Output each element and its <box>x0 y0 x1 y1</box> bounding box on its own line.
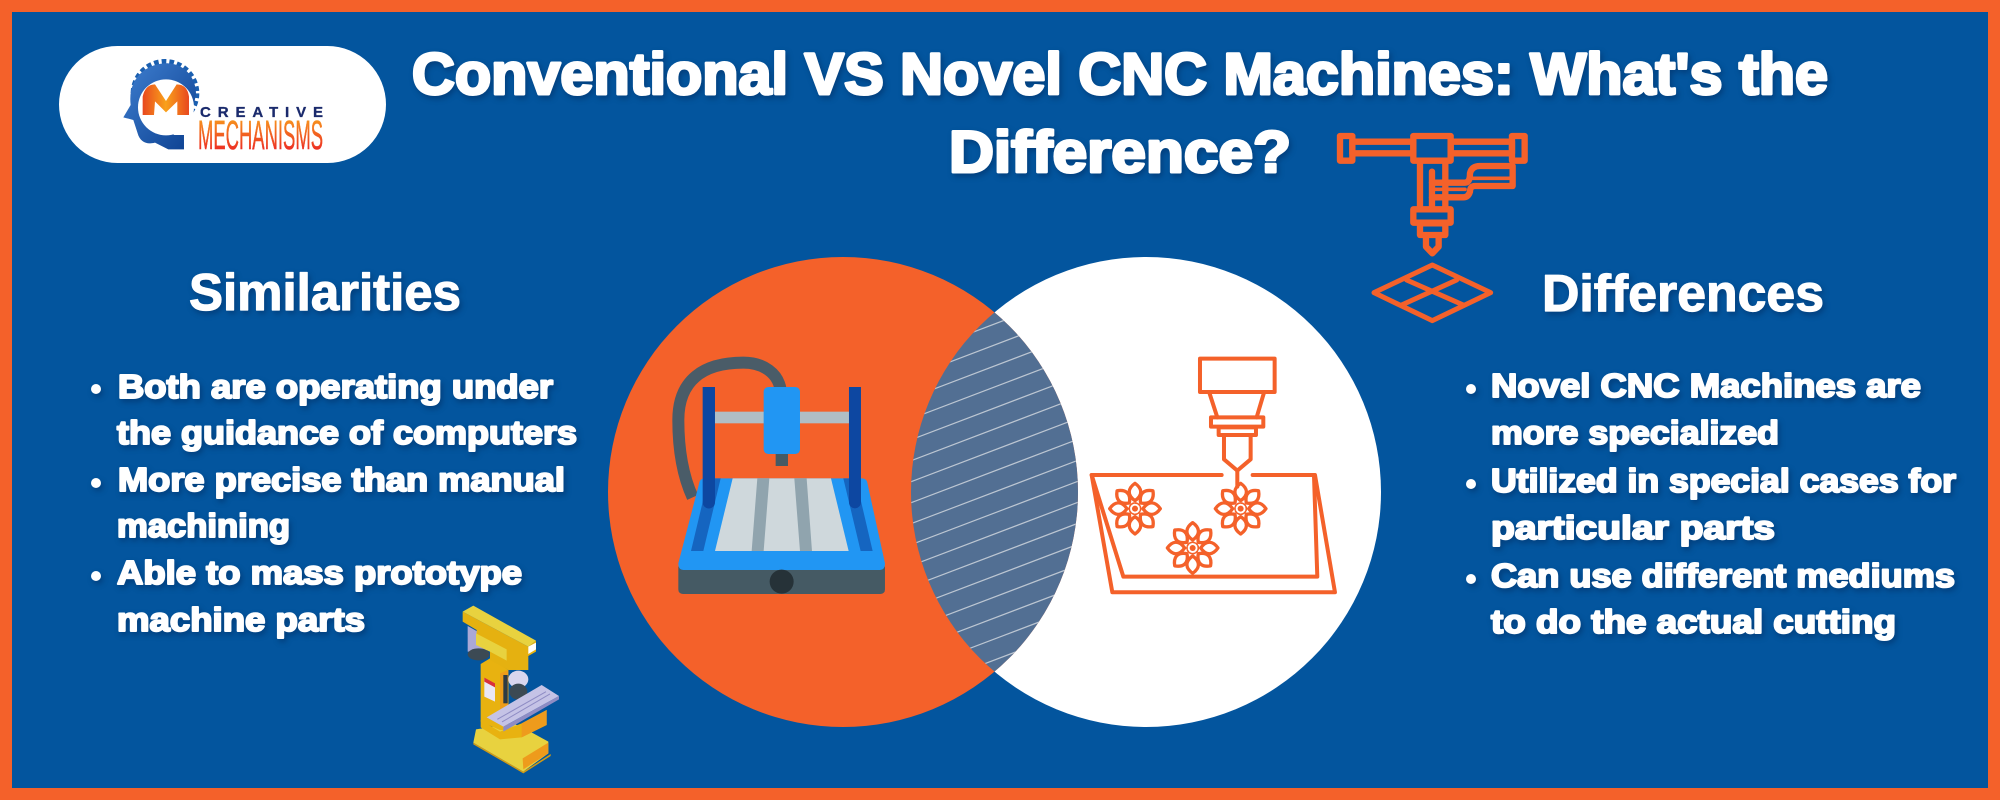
heading: similarities: Similarities <box>189 264 461 322</box>
logo wordmark: creative: CREATIVE <box>200 104 323 121</box>
icon: yellow milling machine <box>463 606 559 773</box>
heading: differences: Differences <box>1542 265 1824 323</box>
icon: laser cutter with flowers <box>1092 359 1335 592</box>
title: Difference? <box>949 120 1291 185</box>
venn diagram <box>608 257 1381 727</box>
logo mark: gear head <box>123 62 200 149</box>
similarities list: More precise than manual <box>118 461 565 498</box>
venn overlap hatched lens <box>911 312 1078 672</box>
venn right circle <box>911 257 1381 727</box>
differences list: Utilized in special cases for <box>1491 462 1956 499</box>
logo: Creative Mechanisms <box>59 46 386 163</box>
similarities list <box>91 368 577 638</box>
similarities list: machining <box>117 507 290 544</box>
differences list: to do the actual cutting <box>1491 603 1896 640</box>
differences list: more specialized <box>1491 414 1779 451</box>
differences list <box>1466 367 1956 640</box>
similarities list: machine parts <box>117 601 365 638</box>
icon: 3D printer <box>1340 136 1525 321</box>
icon: conventional CNC machine <box>678 363 885 594</box>
differences list: Novel CNC Machines are <box>1491 367 1921 404</box>
venn left circle <box>608 257 1078 727</box>
similarities list: Both are operating under <box>118 368 553 405</box>
similarities list: Able to mass prototype <box>117 554 522 591</box>
logo pill <box>59 46 386 163</box>
differences list: particular parts <box>1491 509 1775 546</box>
differences list: Can use different mediums <box>1491 557 1955 594</box>
title <box>412 42 1828 185</box>
title: Conventional VS Novel CNC Machines: What's the <box>412 42 1828 107</box>
similarities list: the guidance of computers <box>117 414 577 451</box>
logo: Creative Mechanisms: MECHANISMS <box>198 112 323 158</box>
